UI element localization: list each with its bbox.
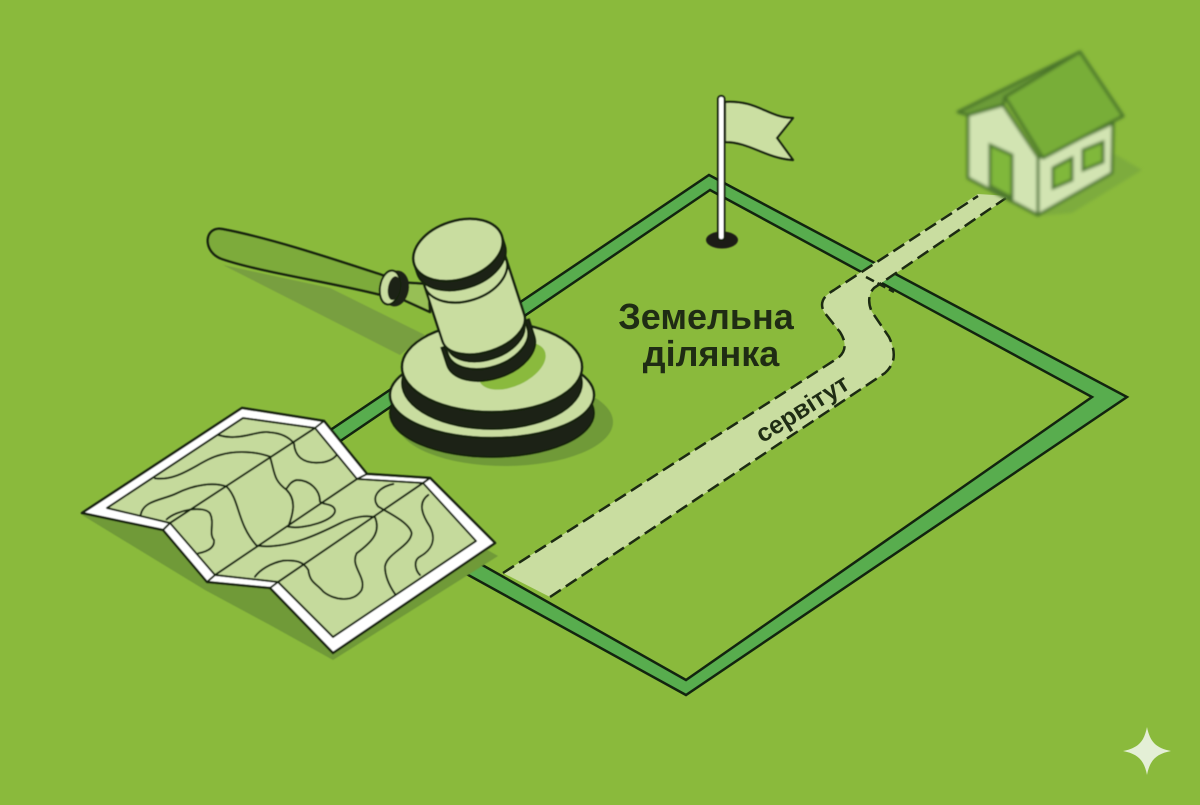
block lower dark edge bbox=[390, 369, 594, 457]
head lower dark ring bbox=[441, 319, 543, 392]
house window right bbox=[1083, 142, 1103, 170]
gavel handle ring bbox=[377, 268, 412, 309]
easement strip fill bbox=[503, 194, 1010, 597]
flag base bbox=[706, 232, 738, 248]
icon: flag bbox=[706, 96, 793, 248]
flag cloth bbox=[725, 102, 793, 160]
gavel base shadow bbox=[397, 378, 613, 466]
gavel handle neck bbox=[395, 282, 430, 312]
map white frame bbox=[82, 408, 495, 653]
easement crossing dashes bbox=[866, 277, 894, 292]
head body bbox=[422, 251, 532, 364]
plot label: Земельна bbox=[618, 296, 795, 337]
easement label: сервітут bbox=[751, 369, 854, 448]
map sheet bbox=[107, 418, 476, 637]
house window left bbox=[1053, 158, 1072, 188]
icon: sparkle watermark bbox=[1123, 727, 1171, 775]
head cap dark edge bbox=[414, 236, 514, 301]
head collar recess bbox=[426, 250, 506, 298]
flag pole bbox=[718, 96, 724, 240]
house shadow bbox=[1038, 153, 1142, 216]
gavel handle bbox=[208, 229, 385, 295]
gavel sounding block bbox=[390, 322, 594, 457]
gavel handle shadow bbox=[223, 265, 425, 355]
head collar line bbox=[425, 260, 515, 313]
plot label: ділянка bbox=[643, 333, 780, 374]
block upper dark edge bbox=[402, 337, 582, 429]
block lower tier bbox=[390, 352, 594, 438]
head lower light ring bbox=[444, 317, 536, 379]
gavel head bbox=[405, 208, 543, 392]
easement upper dashed edge bbox=[503, 196, 978, 573]
easement lower dashed edge bbox=[550, 198, 1006, 597]
icon: gavel bbox=[208, 208, 613, 466]
icon: house bbox=[958, 52, 1142, 216]
house front wall bbox=[968, 105, 1038, 215]
map contour lines bbox=[141, 432, 433, 599]
icon: folded map bbox=[82, 408, 498, 660]
house door bbox=[990, 145, 1012, 198]
head cast shadow bbox=[471, 333, 553, 399]
house side wall bbox=[1038, 123, 1113, 215]
house roof bbox=[1005, 52, 1123, 158]
map shadow bbox=[82, 500, 498, 660]
house roof back edge bbox=[958, 52, 1080, 115]
easement path bbox=[503, 194, 1010, 597]
block upper tier bbox=[402, 322, 582, 412]
map fold lines bbox=[163, 421, 430, 588]
land plot boundary bbox=[274, 175, 1127, 695]
head upper dark ring bbox=[443, 310, 531, 371]
head cap face bbox=[405, 208, 511, 292]
